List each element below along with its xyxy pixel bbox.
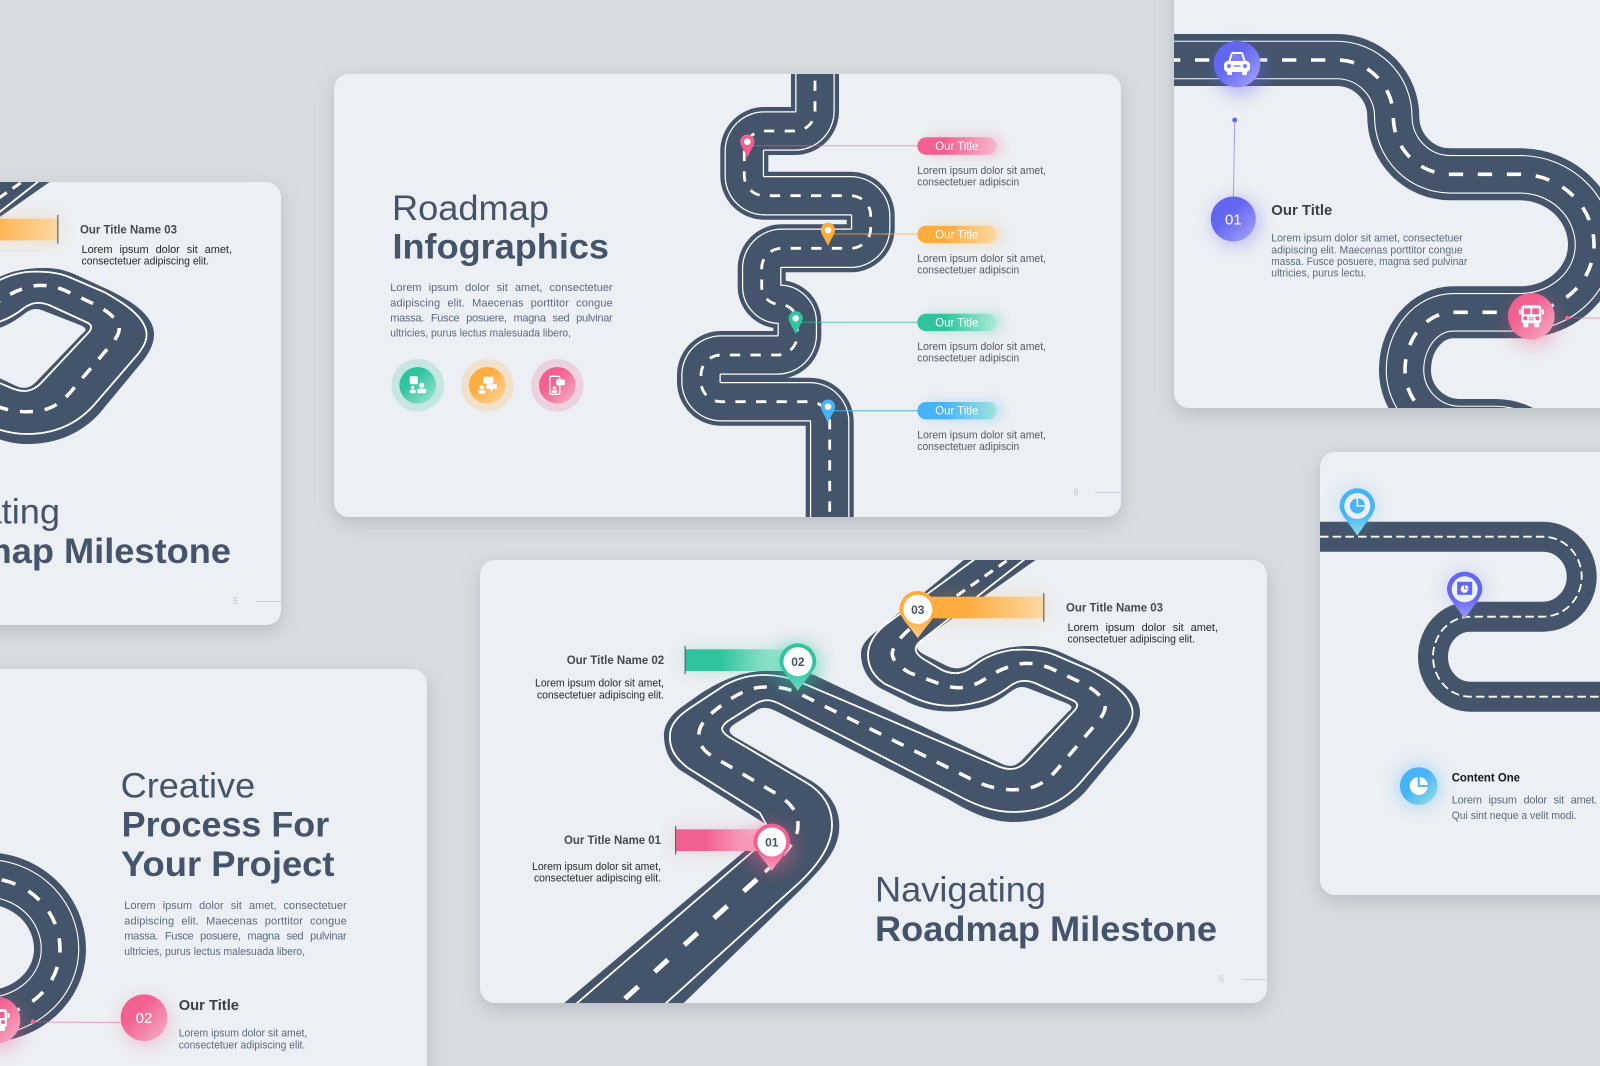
text block: title 01 description: Lorem ipsum dolor sit amet, <box>532 861 661 873</box>
icon: pink phone circle <box>531 359 584 412</box>
text block: intro: adipiscing elit. Maecenas porttitor congue <box>390 297 613 309</box>
panel: cropped milestone slide, left <box>0 182 281 625</box>
text block: process description <box>124 900 347 958</box>
pin: 02 <box>774 642 822 691</box>
text block: green description: Lorem ipsum dolor sit amet, <box>917 341 1046 353</box>
text block: title 03 description: Lorem ipsum dolor sit amet, <box>82 244 232 256</box>
heading: our title: Our Title <box>1271 202 1332 219</box>
pin: purple square <box>1445 569 1485 619</box>
text block: title 01 description <box>532 861 661 885</box>
text block: orange description: Lorem ipsum dolor sit amet, <box>917 253 1046 265</box>
text block: 01 description: ultricies, purus lectu. <box>1271 268 1366 280</box>
text block: 01 description: massa. Fusce posuere, magna sed pulvinar <box>1271 256 1468 268</box>
badge: 01 <box>1211 196 1260 246</box>
panel: content slide, right <box>1320 452 1600 895</box>
icon: car marker <box>1214 41 1265 95</box>
ribbon: title 01 <box>675 826 770 854</box>
text block: intro <box>390 282 613 340</box>
text block: process description: adipiscing elit. Maecenas porttitor congue <box>124 915 347 927</box>
pin: pink <box>740 134 754 158</box>
title: navigating roadmap milestone: Roadmap Milestone <box>875 910 1217 949</box>
heading: content one: Content One <box>1452 771 1520 785</box>
text block: 01 description <box>1271 233 1468 280</box>
pill: blue our title: Our Title <box>935 404 979 418</box>
text block: pink description: Lorem ipsum dolor sit amet, <box>917 165 1046 177</box>
title: roadmap infographics: Infographics <box>392 227 609 266</box>
text block: process description: massa. Fusce posuere, magna sed pulvinar <box>124 931 347 943</box>
page number <box>1074 487 1121 497</box>
title: creative process for your project: Process For <box>122 806 330 845</box>
heading: our title: Our Title <box>179 997 239 1014</box>
panel: process slide, top right <box>1174 0 1600 408</box>
text block: title 03 description <box>1068 622 1218 646</box>
heading: our title name 01: Our Title Name 01 <box>564 835 662 847</box>
text block: blue description: consectetuer adipiscin <box>917 441 1019 453</box>
text block: process description: Lorem ipsum dolor sit amet, consectetuer <box>124 900 347 912</box>
text block: intro: ultricies, purus lectus malesuada libero, <box>390 328 571 340</box>
text block: title 02 description: consectetuer adipiscing elit. <box>537 689 664 701</box>
road: s-curve <box>1174 60 1594 484</box>
text block: orange description <box>917 253 1046 276</box>
pill: orange our title <box>917 223 1003 245</box>
connector: bus dot <box>1565 316 1600 320</box>
pin: 01: 01 <box>765 836 779 850</box>
ribbon: title 03 <box>0 215 58 244</box>
text block: 01 description: adipiscing elit. Maecenas porttitor congue <box>1271 244 1463 256</box>
text block: title 01 description: consectetuer adipiscing elit. <box>534 873 661 885</box>
page number: 6 <box>1074 487 1079 497</box>
pill: pink our title: Our Title <box>935 139 979 153</box>
heading: our title name 02: Our Title Name 02 <box>567 655 664 667</box>
panel: creative process slide, bottom left <box>0 669 427 1066</box>
text block: green description <box>917 341 1046 365</box>
pin: blue <box>821 400 835 423</box>
text block: title 03 description: consectetuer adipiscing elit. <box>82 256 209 268</box>
panel: navigating roadmap milestone slide <box>480 560 1267 1003</box>
text block: content one description: Qui sint neque a velit modi. <box>1452 810 1577 822</box>
pin: green <box>788 311 803 334</box>
road: winding vertical <box>701 60 871 530</box>
pin: blue pie <box>1337 486 1377 536</box>
text block: intro: Lorem ipsum dolor sit amet, consectetuer <box>390 282 613 294</box>
title: navigating roadmap milestone: Navigating <box>875 871 1046 910</box>
title: roadmap infographics <box>392 189 609 266</box>
heading: our title name 03: Our Title Name 03 <box>80 225 177 237</box>
text block: 01 description: Lorem ipsum dolor sit amet, consectetuer <box>1271 233 1463 245</box>
road: flat serpentine <box>1320 537 1600 697</box>
text block: green description: consectetuer adipiscin <box>917 353 1019 365</box>
title: navigating roadmap milestone <box>875 871 1217 949</box>
pin: orange <box>821 223 835 246</box>
icon: bus marker <box>1508 293 1558 347</box>
page number <box>1219 974 1267 984</box>
ribbon: title 03 <box>925 593 1044 622</box>
road: milestone route <box>563 555 1140 1004</box>
icon: green team circle <box>391 359 444 412</box>
road: milestone loop <box>0 177 154 626</box>
pin: 02: 02 <box>791 655 805 669</box>
pill: green our title: Our Title <box>935 315 979 329</box>
page number: 5 <box>1219 974 1224 984</box>
text block: title 03 description: Lorem ipsum dolor sit amet, <box>1068 622 1218 634</box>
pin: 01 <box>748 824 796 872</box>
pill: blue our title <box>917 400 1003 422</box>
text block: content one description: Lorem ipsum dolor sit amet. <box>1452 794 1597 806</box>
title: roadmap infographics: Roadmap <box>392 189 549 228</box>
text block: title 03 description: consectetuer adipiscing elit. <box>1068 634 1195 646</box>
text block: pink description <box>917 165 1046 188</box>
text block: title 03 description <box>82 244 232 268</box>
title: creative process for your project <box>121 767 335 884</box>
title: navigating roadmap milestone <box>0 493 231 571</box>
pill: pink our title <box>917 135 1003 157</box>
text block: 02 description: consectetuer adipiscing elit. <box>179 1039 305 1051</box>
ribbon: title 02 <box>685 646 790 674</box>
badge: 01: 01 <box>1225 212 1242 228</box>
text block: 02 description <box>179 1028 307 1051</box>
pill: orange our title: Our Title <box>935 227 979 241</box>
icon: bus marker <box>0 997 24 1051</box>
text block: pink description: consectetuer adipiscin <box>917 176 1019 188</box>
text block: content one description <box>1452 794 1597 822</box>
pill: green our title <box>917 311 1003 333</box>
connector: bus to 02 <box>31 1019 122 1024</box>
text block: process description: ultricies, purus lectus malesuada libero, <box>124 946 305 958</box>
text block: title 02 description <box>535 678 664 701</box>
connector: car to 01 <box>1232 118 1237 197</box>
heading: our title name 03: Our Title Name 03 <box>1066 603 1163 615</box>
road: ring curve <box>0 764 60 1066</box>
badge: 02 <box>121 994 170 1046</box>
pin: 03 <box>899 591 936 638</box>
text block: intro: massa. Fusce posuere, magna sed pulvinar <box>390 313 613 325</box>
page number <box>233 596 281 606</box>
title: creative process for your project: Creative <box>121 767 255 806</box>
text block: 02 description: Lorem ipsum dolor sit amet, <box>179 1028 307 1040</box>
badge: 02: 02 <box>136 1010 152 1027</box>
page number: 5 <box>233 596 238 606</box>
title: creative process for your project: Your Project <box>121 845 335 884</box>
connector lines <box>750 146 918 411</box>
text block: title 02 description: Lorem ipsum dolor sit amet, <box>535 678 664 690</box>
panel: roadmap infographics slide <box>334 74 1121 517</box>
icon: blue pie badge <box>1397 764 1441 808</box>
text block: blue description <box>917 430 1046 453</box>
text block: orange description: consectetuer adipiscin <box>917 264 1019 276</box>
pin: 03: 03 <box>911 603 925 617</box>
icon: orange message circle <box>461 359 514 412</box>
text block: blue description: Lorem ipsum dolor sit amet, <box>917 430 1046 442</box>
